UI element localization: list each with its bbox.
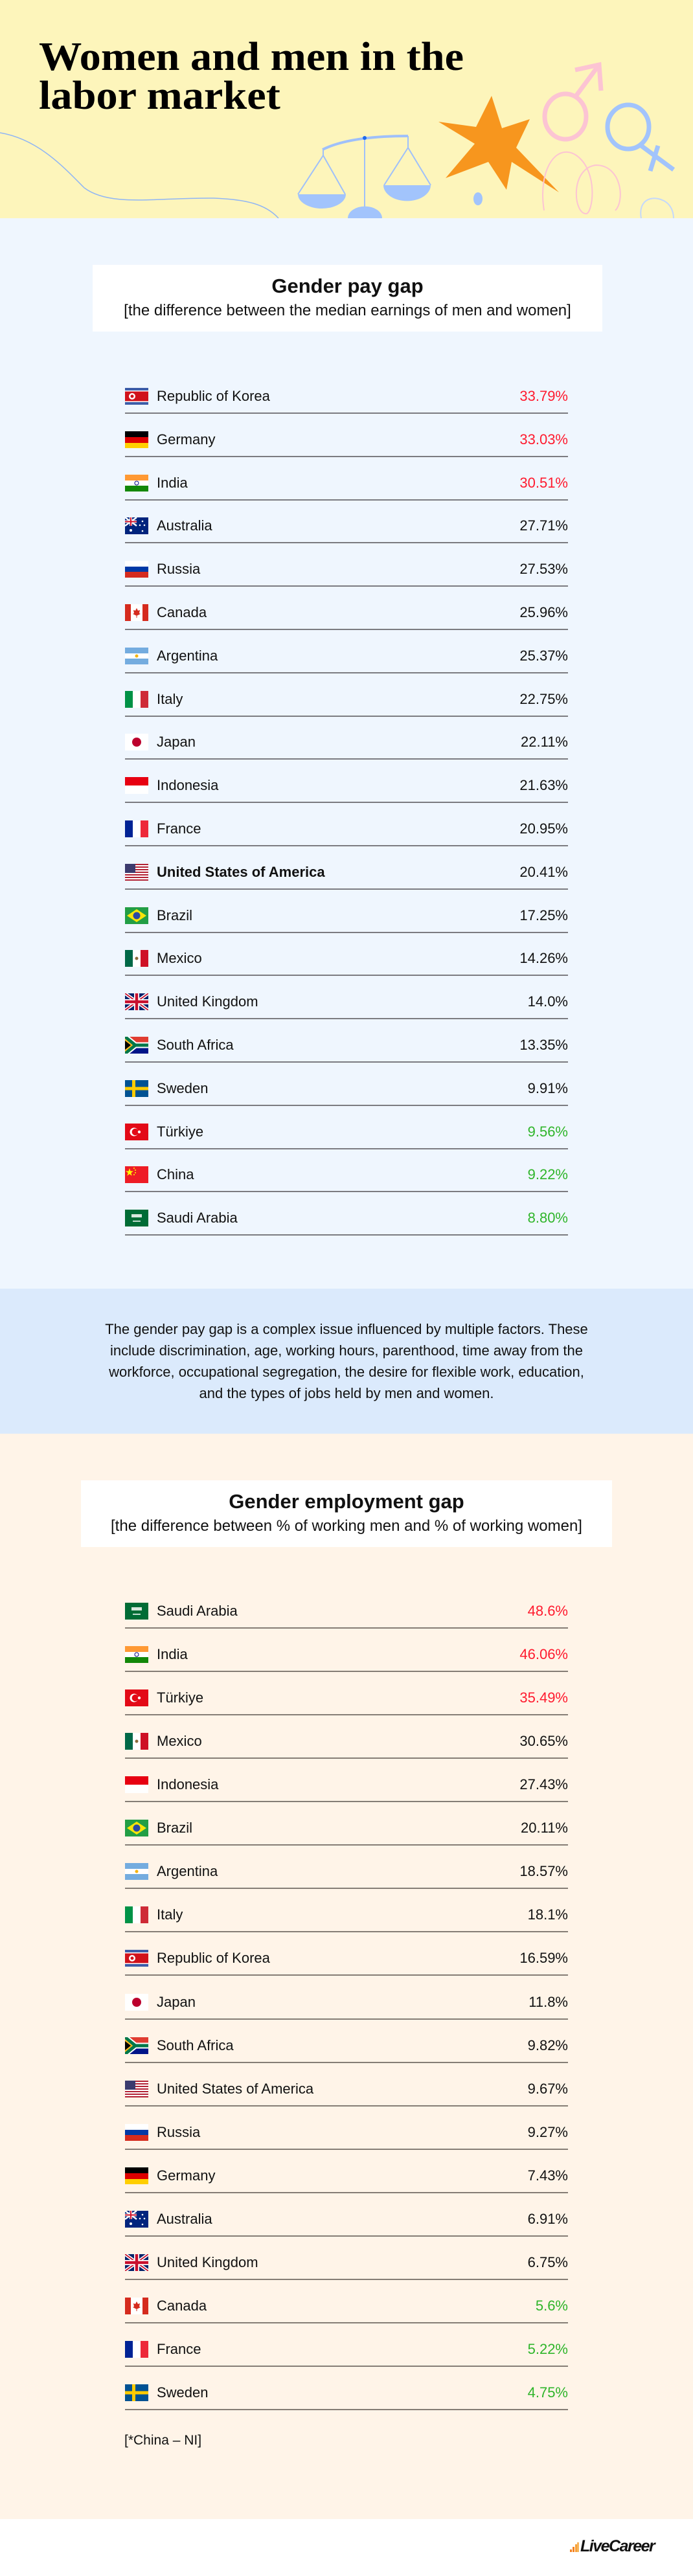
list: employment gap rows: United Kingdom [157,2254,258,2270]
list: pay gap rows: 27.53% [519,561,568,577]
list: employment gap rows: Mexico [157,1733,202,1749]
list: employment gap rows: Türkiye [157,1689,203,1706]
icon: male symbol [545,65,601,139]
list: pay gap rows: 25.96% [519,604,568,620]
list: pay gap rows: United States of America [157,864,325,880]
list: employment gap rows: Germany [157,2167,215,2184]
list: employment gap rows: 9.27% [528,2124,568,2140]
list: employment gap rows: 18.1% [528,1906,568,1923]
heading: gender pay gap: Gender pay gap [271,275,424,297]
text block: explanation: and the types of jobs held by men and women. [199,1385,494,1401]
list: pay gap rows: 9.22% [528,1166,568,1182]
list: employment gap rows: France [157,2341,201,2357]
list: pay gap rows: 22.75% [519,691,568,707]
list: employment gap rows: 35.49% [519,1689,568,1706]
list: pay gap rows: 20.41% [519,864,568,880]
list: employment gap rows: 6.91% [528,2211,568,2227]
list: pay gap rows: France [157,820,201,837]
list: employment gap rows: Republic of Korea [157,1950,270,1966]
icon: orange star [438,96,559,192]
list: pay gap rows: Japan [157,734,196,750]
list: employment gap rows: Canada [157,2298,207,2314]
footnote: [*China – NI] [124,2433,201,2448]
list: pay gap rows [125,388,568,1236]
list: employment gap rows: 9.82% [528,2037,568,2053]
list: pay gap rows: Germany [157,431,215,447]
list: pay gap rows: Brazil [157,907,192,923]
heading: gender pay gap [93,265,602,332]
list: employment gap rows: 6.75% [528,2254,568,2270]
list: pay gap rows: Italy [157,691,183,707]
list: pay gap rows: Republic of Korea [157,388,270,404]
list: pay gap rows: Türkiye [157,1124,203,1140]
list: pay gap rows: 14.0% [528,993,568,1010]
list: pay gap rows: 17.25% [519,907,568,923]
list: pay gap rows: 9.56% [528,1124,568,1140]
list: pay gap rows: Sweden [157,1080,209,1096]
list: employment gap rows: Indonesia [157,1776,218,1792]
list: employment gap rows: Russia [157,2124,200,2140]
list: pay gap rows: 33.03% [519,431,568,447]
text block: explanation: include discrimination, age, working hours, parenthood, time away from the [110,1342,583,1359]
list: employment gap rows: 11.8% [528,1994,568,2010]
list: pay gap rows: 30.51% [519,475,568,491]
list: employment gap rows: 27.43% [519,1776,568,1792]
list: pay gap rows: Argentina [157,648,218,664]
list: pay gap rows: 33.79% [519,388,568,404]
title: labor market [39,74,280,118]
icon: female symbol [608,105,674,171]
list: pay gap rows: 21.63% [519,777,568,793]
list: employment gap rows: 46.06% [519,1646,568,1662]
list: pay gap rows: 14.26% [519,950,568,966]
panel: gender pay gap [0,218,693,1289]
list: employment gap rows: Australia [157,2211,212,2227]
panel: gender employment gap [0,1434,693,2519]
list: employment gap rows: Italy [157,1906,183,1923]
list: employment gap rows: 7.43% [528,2167,568,2184]
list: employment gap rows [125,1603,568,2410]
list: pay gap rows: South Africa [157,1037,234,1053]
list: pay gap rows: 22.11% [521,734,568,750]
title: Women and men in the [39,35,464,79]
list: pay gap rows: 9.91% [528,1080,568,1096]
list: pay gap rows: 20.95% [519,820,568,837]
list: pay gap rows: 25.37% [519,648,568,664]
list: employment gap rows: 5.6% [536,2298,568,2314]
header decorations [0,62,675,218]
list: pay gap rows: 27.71% [519,517,568,534]
title [39,35,464,118]
list: employment gap rows: 4.75% [528,2384,568,2401]
list: employment gap rows: South Africa [157,2037,234,2053]
list: pay gap rows: India [157,475,188,491]
list: employment gap rows: Argentina [157,1863,218,1879]
heading: gender employment gap [81,1480,612,1547]
list: pay gap rows: United Kingdom [157,993,258,1010]
list: employment gap rows: 18.57% [519,1863,568,1879]
list: pay gap rows: Australia [157,517,212,534]
list: employment gap rows: 5.22% [528,2341,568,2357]
list: pay gap rows: 8.80% [528,1210,568,1226]
list: pay gap rows: China [157,1166,194,1182]
list: employment gap rows: 48.6% [528,1603,568,1619]
list: employment gap rows: Saudi Arabia [157,1603,238,1619]
text block: explanation [0,1289,693,1434]
list: employment gap rows: Brazil [157,1820,192,1836]
list: pay gap rows: Russia [157,561,200,577]
heading: gender employment gap: Gender employment gap [229,1490,464,1513]
text block: explanation: The gender pay gap is a complex issue influenced by multiple factors. These [105,1321,588,1337]
list: pay gap rows: Saudi Arabia [157,1210,238,1226]
list: employment gap rows: India [157,1646,188,1662]
list: pay gap rows: 13.35% [519,1037,568,1053]
heading: gender pay gap: [the difference between the median earnings of men and women] [124,302,571,319]
list: employment gap rows: 16.59% [519,1950,568,1966]
list: employment gap rows: Japan [157,1994,196,2010]
list: pay gap rows: Mexico [157,950,202,966]
list: employment gap rows: 9.67% [528,2081,568,2097]
logo: LiveCareer: LiveCareer [580,2537,654,2555]
list: employment gap rows: 20.11% [521,1820,568,1836]
list: pay gap rows: Indonesia [157,777,218,793]
header banner [0,0,693,218]
text block: explanation: workforce, occupational segregation, the desire for flexible work, education, [109,1364,584,1380]
heading: gender employment gap: [the difference between % of working men and % of working women] [111,1517,582,1535]
list: employment gap rows: Sweden [157,2384,209,2401]
list: employment gap rows: United States of America [157,2081,313,2097]
list: pay gap rows: Canada [157,604,207,620]
list: employment gap rows: 30.65% [519,1733,568,1749]
